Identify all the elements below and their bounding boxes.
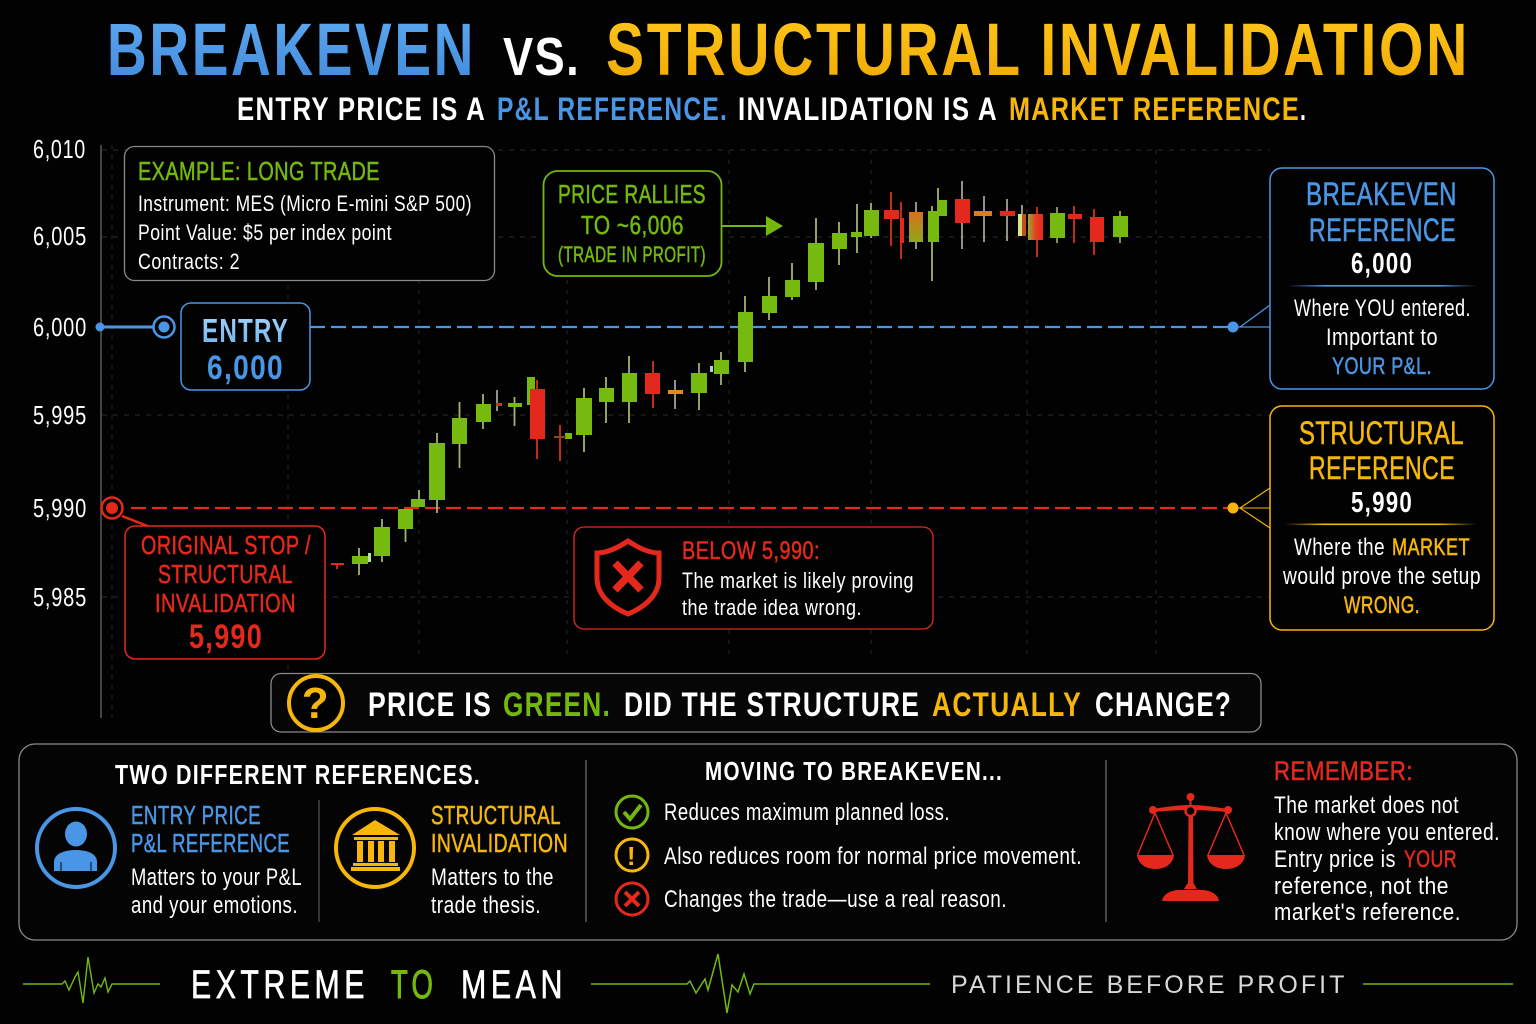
price axis labels: 5,990 [33, 493, 87, 523]
footer brand: EXTREME [191, 963, 369, 1007]
text: structural invalidation: INVALIDATION [431, 828, 568, 858]
panel: structural reference: WRONG. [1344, 592, 1420, 619]
title: BREAKEVEN [107, 8, 476, 91]
footer brand: TO [391, 963, 437, 1007]
panel: structural reference: REFERENCE [1309, 450, 1455, 486]
callout: price rallies [544, 171, 722, 276]
price axis labels: 6,010 [33, 134, 86, 164]
price axis labels: 5,985 [33, 582, 87, 612]
text: remember: reference, not the [1274, 873, 1449, 900]
footer brand [191, 963, 567, 1007]
text: remember: The market does not [1274, 792, 1459, 819]
text: entry price: Matters to your P&L [131, 864, 302, 891]
callout: price rallies: TO ~6,006 [581, 210, 684, 240]
icon: scales [1137, 793, 1245, 901]
callout: below 5,990: The market is likely proving [682, 568, 914, 593]
panel: breakeven reference: REFERENCE [1309, 212, 1456, 248]
text: structural invalidation [431, 800, 568, 919]
callout: original stop [125, 526, 325, 659]
title [107, 8, 1470, 91]
panel: structural reference: Where the [1294, 534, 1385, 561]
arrow: rally to high [721, 216, 783, 236]
text: entry price: P&L REFERENCE [131, 828, 290, 858]
icon: bank [336, 809, 414, 887]
panel: example long trade: Instrument: MES (Micro E-mini S&P 500) [138, 191, 472, 216]
panel: structural reference: MARKET [1392, 534, 1470, 561]
question banner: PRICE IS [368, 686, 492, 724]
entry reference dashed line [310, 326, 1233, 328]
callout: original stop: INVALIDATION [155, 588, 296, 618]
icon: warning [616, 839, 648, 871]
title: VS. [503, 27, 580, 87]
price axis labels: 6,005 [33, 221, 87, 251]
panel: structural reference [1270, 406, 1494, 630]
callout: price rallies: (TRADE IN PROFIT) [558, 242, 706, 267]
panel: bottom summary [19, 744, 1517, 940]
text: changes the trade: Changes the trade—use a real reason. [664, 886, 1007, 913]
subtitle: INVALIDATION IS A [738, 91, 998, 127]
callout: below 5,990: BELOW 5,990: [682, 537, 820, 565]
text: remember: YOUR [1404, 846, 1457, 873]
text: remember [1274, 756, 1500, 926]
stop marker [102, 498, 150, 527]
text: entry price [131, 800, 302, 919]
question banner: ACTUALLY [932, 686, 1082, 724]
icon: person [37, 809, 115, 887]
chart grid and axis [101, 145, 1270, 718]
subtitle: P&L REFERENCE. [497, 91, 728, 127]
subtitle [237, 91, 1307, 127]
text: remember: Entry price is [1274, 846, 1396, 873]
callout: original stop: STRUCTURAL [158, 559, 293, 589]
price axis labels [33, 134, 87, 612]
callout: price rallies: PRICE RALLIES [558, 179, 706, 209]
footer tagline: PATIENCE BEFORE PROFIT [951, 971, 1345, 999]
footer middle pulse line [591, 954, 930, 1013]
panel: breakeven reference: 6,000 [1351, 248, 1413, 280]
price axis labels: 5,995 [33, 400, 87, 430]
panel: example long trade: EXAMPLE: LONG TRADE [138, 156, 380, 186]
footer left pulse line [23, 957, 160, 1003]
question banner: GREEN. [503, 686, 611, 724]
text: remember: REMEMBER: [1274, 756, 1413, 786]
panel: structural reference: 5,990 [1351, 487, 1413, 519]
panel: example long trade: Point Value: $5 per index point [138, 220, 392, 245]
callout: original stop: 5,990 [189, 618, 263, 656]
text: structural invalidation: trade thesis. [431, 892, 541, 919]
text: structural invalidation: STRUCTURAL [431, 800, 561, 830]
icon: check [616, 796, 648, 828]
icon: shield with x [597, 541, 659, 614]
panel: example long trade: Contracts: 2 [138, 249, 240, 274]
text: structural invalidation: Matters to the [431, 864, 554, 891]
heading: moving to breakeven: MOVING TO BREAKEVEN... [705, 756, 1003, 786]
text: entry price: and your emotions. [131, 892, 298, 919]
icon: warning: ! [627, 841, 637, 871]
callout: entry 6,000: ENTRY [202, 312, 289, 349]
structural line connector [1228, 488, 1270, 528]
panel: breakeven reference: Where YOU entered. [1294, 295, 1471, 322]
price axis labels: 6,000 [33, 312, 87, 342]
panel: structural reference: STRUCTURAL [1299, 415, 1464, 451]
callout: entry 6,000: 6,000 [207, 349, 284, 387]
callout: below 5,990: the trade idea wrong. [682, 595, 862, 620]
question banner: CHANGE? [1095, 686, 1232, 724]
icon: question mark [289, 676, 343, 730]
panel: breakeven reference [1270, 168, 1494, 389]
subtitle: ENTRY PRICE IS A [237, 91, 486, 127]
footer right line [1363, 983, 1513, 985]
heading: two different references: TWO DIFFERENT REFERENCES. [115, 759, 481, 790]
subtitle: . [1300, 91, 1307, 127]
text: reduces maximum planned loss: Reduces maximum planned loss. [664, 799, 950, 826]
subtitle: MARKET REFERENCE [1009, 91, 1300, 127]
icon: cross [616, 883, 648, 915]
text: remember: market's reference. [1274, 899, 1461, 926]
candlestick chart [331, 181, 1128, 575]
question banner: DID THE STRUCTURE [624, 686, 920, 724]
callout: original stop: ORIGINAL STOP / [141, 530, 311, 560]
structural invalidation dashed line [131, 507, 1233, 509]
text: reduces room: Also reduces room for normal price movement. [664, 843, 1082, 870]
text: entry price: ENTRY PRICE [131, 800, 261, 830]
panel: breakeven reference: YOUR P&L. [1332, 353, 1432, 380]
entry line connector [1228, 305, 1270, 332]
panel: breakeven reference: BREAKEVEN [1306, 176, 1457, 212]
icon: question mark: ? [302, 679, 330, 728]
panel: breakeven reference: Important to [1326, 324, 1438, 351]
question banner [271, 674, 1261, 732]
footer brand: MEAN [461, 963, 567, 1007]
entry marker [96, 316, 174, 338]
callout: entry 6,000 [181, 303, 310, 390]
panel: structural reference: would prove the setup [1282, 563, 1481, 590]
callout: below 5,990 [574, 527, 933, 629]
panel: example long trade [124, 146, 494, 280]
